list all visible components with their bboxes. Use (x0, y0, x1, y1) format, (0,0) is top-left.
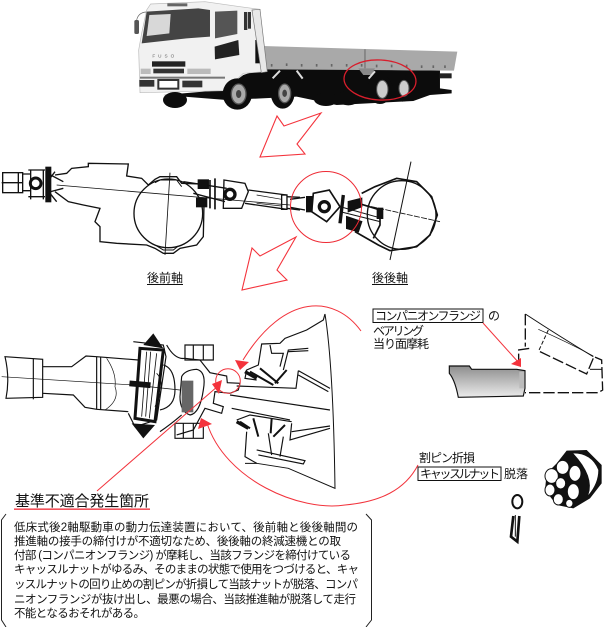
circle on rear-rear axle pinion (290, 172, 362, 242)
arrow: truck to axle diagram (260, 113, 321, 157)
icon: broken cotter pin (511, 495, 522, 542)
rear-rear axle housing (355, 162, 440, 260)
propeller shaft section (2, 356, 180, 412)
companion flange (160, 345, 240, 438)
input yoke (2, 167, 63, 202)
universal joint (128, 333, 175, 438)
callout: companion flange bearing wear: の (488, 309, 500, 323)
description lines: 不能となるおそれがある。 (14, 606, 145, 620)
red leader curve to bearing surface (235, 306, 361, 370)
worn bearing surface (519, 372, 524, 388)
axle diagram (2, 163, 300, 255)
small red circle on flange bearing surface (216, 369, 240, 393)
truck wheels (163, 75, 413, 110)
flange shaft section (449, 366, 525, 397)
heading: non-conformity location: 基準不適合発生箇所 (15, 493, 149, 510)
truck photograph (134, 2, 457, 110)
propeller shaft (183, 178, 300, 210)
callout: cotter pin broken, castle nut dropped (418, 450, 528, 481)
callout: companion flange bearing wear (373, 309, 500, 351)
bracket left (2, 514, 6, 627)
final drive housing (230, 314, 335, 488)
red ellipse on truck rear axles (343, 58, 417, 102)
description lines: 付部 (コンパニオンフランジ) が摩耗し、当該フランジを締付けている (14, 548, 351, 562)
description text block (2, 514, 372, 627)
red leader curve to castle nut (198, 418, 418, 506)
truck rear lights (440, 73, 452, 78)
description lines: ニオンフランジが抜け出し、最悪の場合、当該推進軸が脱落して走行 (14, 592, 356, 606)
description lines: キャッスルナットがゆるみ、そのままの状態で使用をつづけると、キャ (14, 562, 359, 576)
arrow: axle diagram to detail (242, 237, 296, 290)
callout: companion flange bearing wear: ベアリング (373, 324, 424, 338)
callout: companion flange bearing wear: 当り面摩耗 (373, 337, 429, 351)
truck cab: FUSO (152, 54, 177, 59)
enlarged pinion detail drawing (2, 333, 240, 438)
front-rear axle housing (55, 163, 290, 255)
truck flatbed (263, 46, 457, 79)
icon: castle nut (545, 450, 602, 508)
description lines (14, 520, 359, 620)
description lines: ッスルナットの回り止めの割ピンが折損して当該ナットが脱落、コンパ (14, 577, 358, 591)
truck chassis (163, 68, 452, 105)
callout: cotter pin broken, castle nut dropped: 割ピン折損 (419, 450, 475, 465)
flange wear detail drawing (449, 314, 603, 397)
red leader line from heading to flange (97, 380, 222, 491)
label: 後前軸: 後前軸 (147, 270, 183, 285)
description lines: 推進軸の接手の締付けが不適切なため、後後軸の終減速機との取 (14, 534, 342, 548)
description lines: 低床式後2軸駆動車の動力伝達装置において、後前軸と後後軸間の (14, 520, 358, 534)
bracket right (366, 514, 372, 627)
label: 後後軸: 後後軸 (372, 271, 408, 285)
red leader to worn surface (483, 323, 521, 367)
callout: companion flange bearing wear: コンパニオンフランジ (375, 309, 481, 323)
rear pinion and yoke (290, 190, 383, 232)
truck cab (134, 2, 267, 93)
callout: cotter pin broken, castle nut dropped: 脱落 (504, 466, 528, 481)
callout: cotter pin broken, castle nut dropped: キャッスルナット (420, 467, 500, 481)
housing dashed outline (519, 314, 603, 393)
